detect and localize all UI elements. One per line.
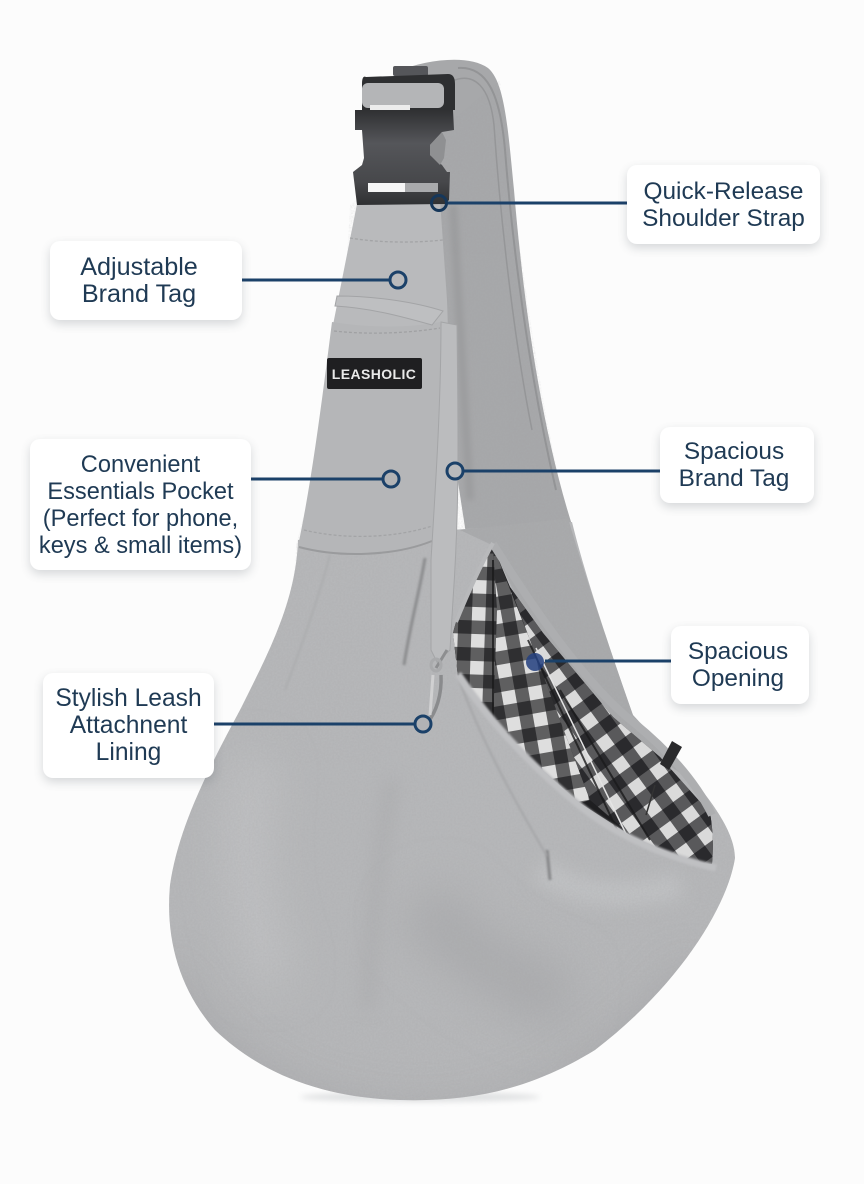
callout: Quick-Release Shoulder Strap: Quick-Release	[644, 178, 803, 204]
neck of strap below buckle	[332, 200, 448, 330]
brand tag: LEASHOLIC	[332, 366, 416, 382]
brand tag	[327, 358, 422, 389]
vertical leash strip	[431, 322, 458, 662]
callout: Adjustable Brand Tag	[50, 241, 242, 320]
callout: Convenient Essentials Pocket: keys & small items)	[39, 532, 242, 558]
leader: pocket	[251, 471, 399, 487]
leader: spacious opening	[526, 653, 671, 671]
opening trim	[493, 544, 712, 815]
ground shadow	[300, 1092, 540, 1102]
plastic buckle	[353, 66, 455, 205]
callout: Stylish Leash Attachment Lining: Lining	[96, 739, 161, 766]
back shoulder strap	[395, 60, 572, 560]
callout: Stylish Leash Attachment Lining: Stylish Leash	[55, 685, 202, 712]
middle fold	[493, 546, 590, 803]
adjustable tab	[335, 296, 443, 325]
main sling body	[169, 81, 735, 1100]
callout: Convenient Essentials Pocket	[30, 439, 251, 570]
callout: Stylish Leash Attachment Lining	[43, 673, 214, 778]
callout: Spacious Opening: Spacious	[688, 638, 788, 665]
fabric noise	[294, 81, 556, 572]
callout: Quick-Release Shoulder Strap	[627, 165, 820, 244]
callout: Spacious Brand Tag	[660, 427, 814, 503]
right panel below strap hem	[460, 518, 690, 780]
callout: Convenient Essentials Pocket: Convenient	[81, 452, 200, 478]
illustration: grey pet sling bag with callout leaders	[169, 60, 735, 1104]
pleat lines	[404, 558, 425, 665]
gingham lining in opening	[453, 543, 716, 868]
callout: Convenient Essentials Pocket: (Perfect for phone,	[43, 506, 238, 532]
leader: leash attachment	[214, 716, 431, 732]
callout: Spacious Brand Tag: Brand Tag	[679, 465, 789, 492]
leash clip	[428, 650, 447, 722]
front pocket panel	[298, 238, 443, 554]
callout: Adjustable Brand Tag: Adjustable	[80, 252, 198, 280]
callout: Spacious Opening	[671, 626, 809, 704]
leader: adjustable	[242, 272, 406, 288]
callout: Spacious Brand Tag: Spacious	[684, 438, 784, 465]
callout: Stylish Leash Attachment Lining: Attachnent	[70, 712, 187, 739]
small toggle on elastic cord	[660, 741, 682, 770]
left fold	[453, 546, 497, 723]
right fold	[510, 587, 713, 864]
callout: Spacious Opening: Opening	[692, 665, 784, 692]
soft shading	[432, 914, 548, 1002]
callout: Adjustable Brand Tag: Brand Tag	[82, 280, 196, 308]
leader: quick-release	[432, 196, 627, 210]
callout: Convenient Essentials Pocket: Essentials Pocket	[47, 478, 234, 504]
leader: spacious brand tag	[447, 463, 660, 479]
callout: Quick-Release Shoulder Strap: Shoulder Strap	[642, 204, 805, 232]
